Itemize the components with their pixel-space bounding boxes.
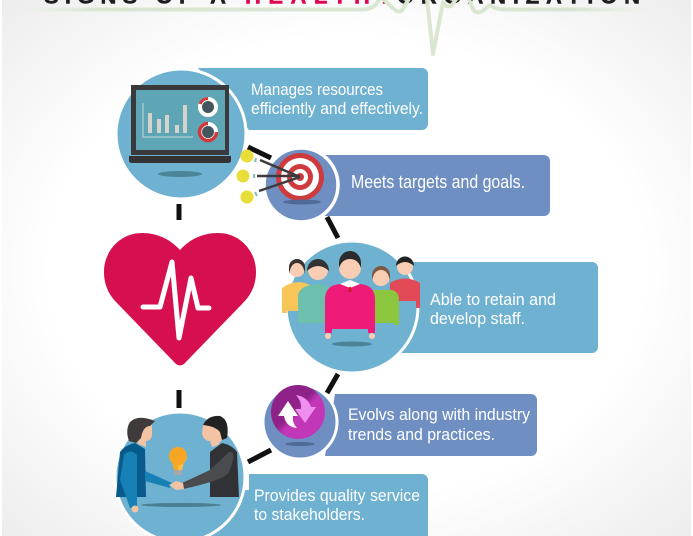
circle icon: team of people [282, 241, 420, 373]
person: teal [298, 259, 335, 323]
person: pink centre [325, 251, 375, 339]
ECG line behind title [22, 0, 650, 54]
panel: manages resources: efficiently and effectively. [251, 99, 423, 118]
circle icon: laptop with charts [116, 69, 246, 199]
person: red [390, 256, 420, 308]
title [44, 0, 640, 8]
panel: evolves with trends: Evolvs along with industry [348, 405, 530, 424]
circle icon: handshake with bulb [115, 412, 245, 536]
panel: meets targets [320, 155, 550, 216]
connector strokes [179, 147, 338, 462]
panel: evolves with trends [325, 394, 537, 456]
left man [116, 418, 172, 512]
panel: retain staff [400, 262, 598, 353]
panel: retain staff: develop staff. [430, 309, 525, 328]
panel: quality service: Provides quality service [254, 486, 420, 505]
circle icon: purple refresh arrows [263, 385, 337, 459]
panel: manages resources [198, 68, 428, 130]
panel: retain staff: Able to retain and [430, 290, 556, 309]
person: green [372, 266, 399, 325]
circle icon: target with darts [236, 148, 338, 222]
light bulb [169, 447, 187, 475]
panel: quality service: to stakeholders. [254, 505, 365, 524]
person: yellow [282, 259, 310, 313]
handshake [169, 481, 184, 490]
right man [182, 416, 239, 497]
panel: quality service [200, 474, 428, 536]
panel: evolves with trends: trends and practices. [348, 425, 495, 444]
panel: meets targets: Meets targets and goals. [351, 172, 525, 192]
heart icon with pulse [104, 233, 256, 366]
panel: manages resources: Manages resources [251, 80, 383, 99]
